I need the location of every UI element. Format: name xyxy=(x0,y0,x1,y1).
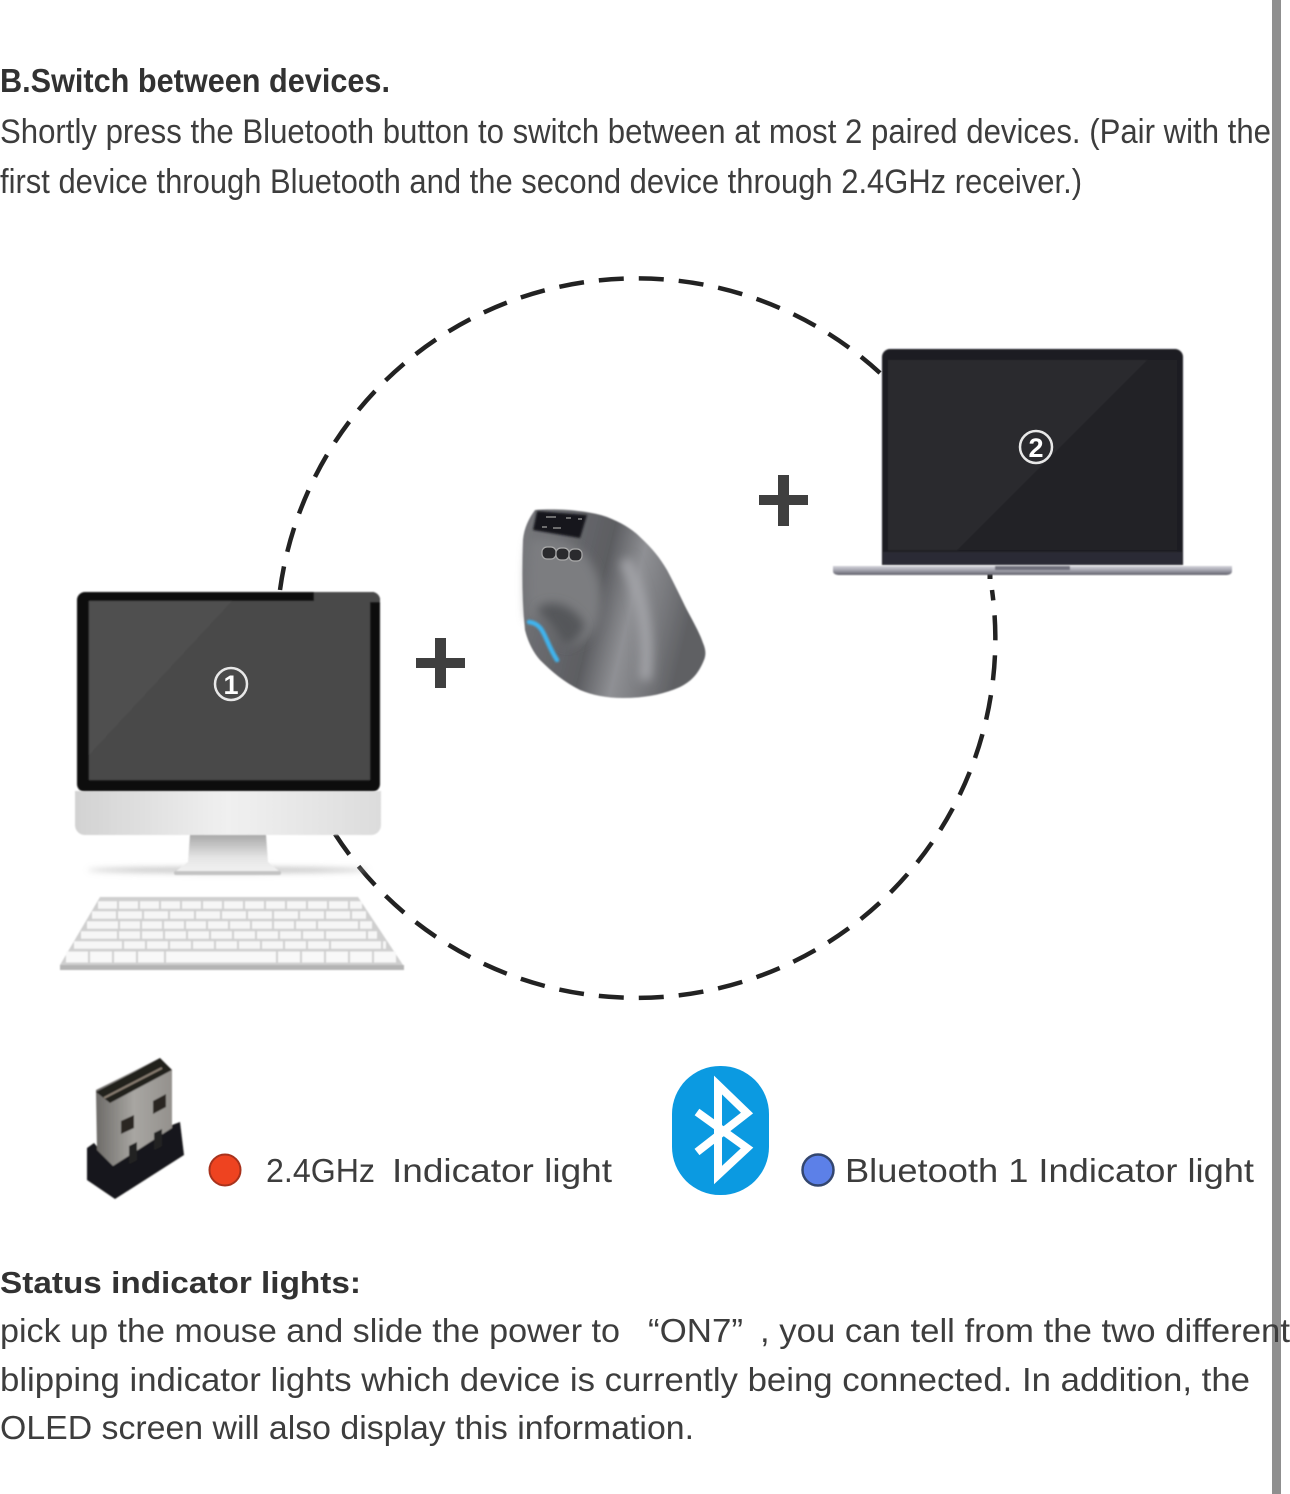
number badge 1 xyxy=(215,668,247,700)
oled screen xyxy=(533,511,587,538)
thumb rest xyxy=(527,538,601,645)
status description text: “ON7” xyxy=(648,1312,743,1349)
status description text: OLED screen will also display this information. xyxy=(0,1409,694,1446)
icon: usb receiver xyxy=(87,1058,184,1199)
thumb groove xyxy=(536,603,585,646)
plus sign right xyxy=(759,475,808,526)
number badge 2: 2 xyxy=(1028,433,1044,463)
label: bluetooth 1 indicator light: Bluetooth 1 Indicator light xyxy=(845,1152,1254,1189)
monitor chin and stand xyxy=(75,791,381,875)
label: 2.4GHz indicator light: Indicator light xyxy=(392,1152,612,1189)
label: 2.4GHz indicator light xyxy=(266,1152,612,1189)
body highlight xyxy=(625,560,646,680)
icon: bluetooth badge xyxy=(672,1066,769,1195)
legend: bluetooth xyxy=(672,1066,1254,1195)
plus sign left xyxy=(416,638,465,688)
mouse body xyxy=(522,509,705,698)
laptop base xyxy=(833,566,1232,575)
heading: switch between devices: B.Switch between devices. xyxy=(0,62,390,99)
indicator: red light xyxy=(210,1154,240,1186)
blue light strip xyxy=(529,622,557,660)
laptop lid xyxy=(882,349,1183,565)
status description text: blipping indicator lights which device is currently being connected. In addition, the xyxy=(0,1361,1250,1398)
heading: status indicator lights: Status indicator lights: xyxy=(0,1265,361,1300)
status description text: , you can tell from the two different xyxy=(760,1312,1290,1349)
keyboard xyxy=(60,897,404,970)
intro text block xyxy=(0,113,1271,201)
mouse buttons xyxy=(542,547,582,561)
status description text xyxy=(0,1312,1290,1446)
label: 2.4GHz indicator light: 2.4GHz xyxy=(266,1152,375,1189)
number badge 2 xyxy=(1020,431,1052,463)
number badge 1: 1 xyxy=(223,670,239,700)
wireless vertical mouse xyxy=(522,509,705,698)
monitor screen xyxy=(77,592,380,792)
intro text block: first device through Bluetooth and the second device through 2.4GHz receiver.) xyxy=(0,163,1082,201)
status description text: pick up the mouse and slide the power to xyxy=(0,1312,620,1349)
device 2: laptop xyxy=(833,349,1232,575)
device 1: desktop computer and keyboard xyxy=(60,592,404,970)
legend: 2.4GHz receiver xyxy=(87,1058,612,1199)
dashed connection circle xyxy=(280,278,995,998)
indicator: blue light xyxy=(802,1154,834,1186)
